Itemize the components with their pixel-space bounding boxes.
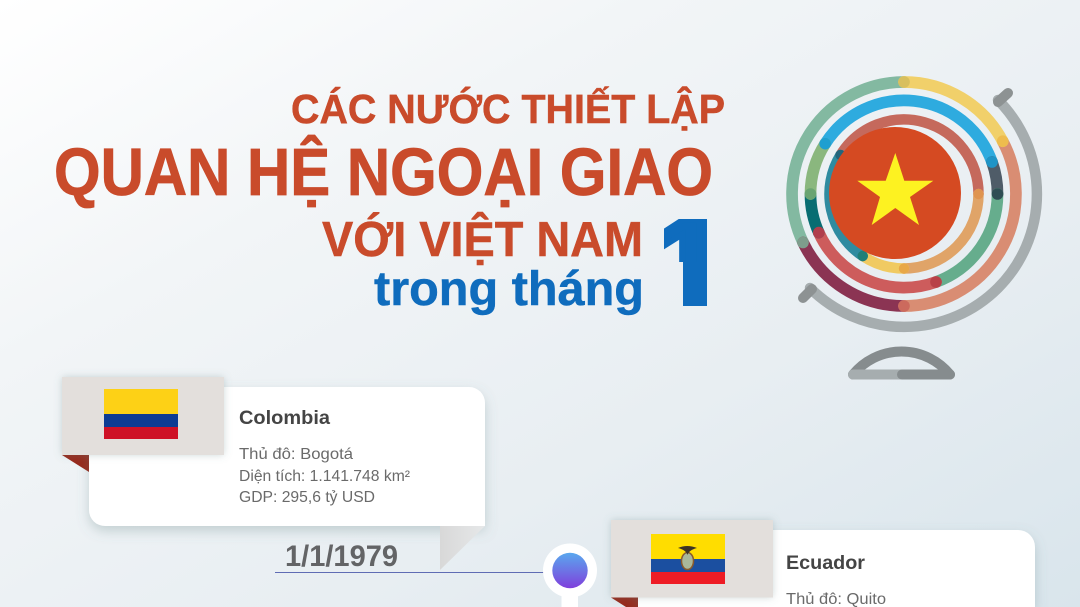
globe icon xyxy=(792,76,1037,374)
flag of ecuador xyxy=(651,534,725,584)
card xyxy=(638,530,1035,607)
flag of colombia xyxy=(104,389,178,439)
country facts xyxy=(239,446,410,506)
outer ring xyxy=(792,76,1016,312)
flag panel xyxy=(62,377,224,455)
country facts: GDP: 295,6 tỷ USD xyxy=(239,489,375,506)
title line: các nước thiết lập: CÁC NƯỚC THIẾT LẬP xyxy=(291,86,725,132)
red fold xyxy=(611,598,638,607)
inner ring xyxy=(829,119,984,274)
country name: Ecuador xyxy=(786,553,866,574)
date: 1/1/1979: 1/1/1979 xyxy=(285,540,398,573)
title line: trong tháng: trong tháng xyxy=(374,263,644,316)
title xyxy=(54,86,725,333)
light fold xyxy=(440,526,485,570)
card xyxy=(89,387,485,526)
panel: colombia xyxy=(62,377,485,570)
timeline dot xyxy=(552,553,588,588)
star xyxy=(857,153,933,225)
red fold xyxy=(62,455,89,472)
timeline connector xyxy=(275,544,597,607)
panel: ecuador xyxy=(611,520,1035,607)
title numeral: 1 xyxy=(664,219,707,306)
globe base xyxy=(853,351,950,374)
title line: với việt nam: VỚI VIỆT NAM xyxy=(322,212,643,267)
country name: Colombia xyxy=(239,408,330,429)
flag panel xyxy=(611,520,773,598)
title numeral: 1: 1 xyxy=(653,194,723,333)
country facts: Thủ đô: Bogotá xyxy=(239,446,353,463)
vietnam flag circle xyxy=(829,127,961,259)
middle ring xyxy=(805,100,1003,288)
globe stand arc xyxy=(803,93,1037,327)
country facts: Diện tích: 1.141.748 km² xyxy=(239,468,410,485)
title line: quan hệ ngoại giao: QUAN HỆ NGOẠI GIAO xyxy=(54,135,713,210)
